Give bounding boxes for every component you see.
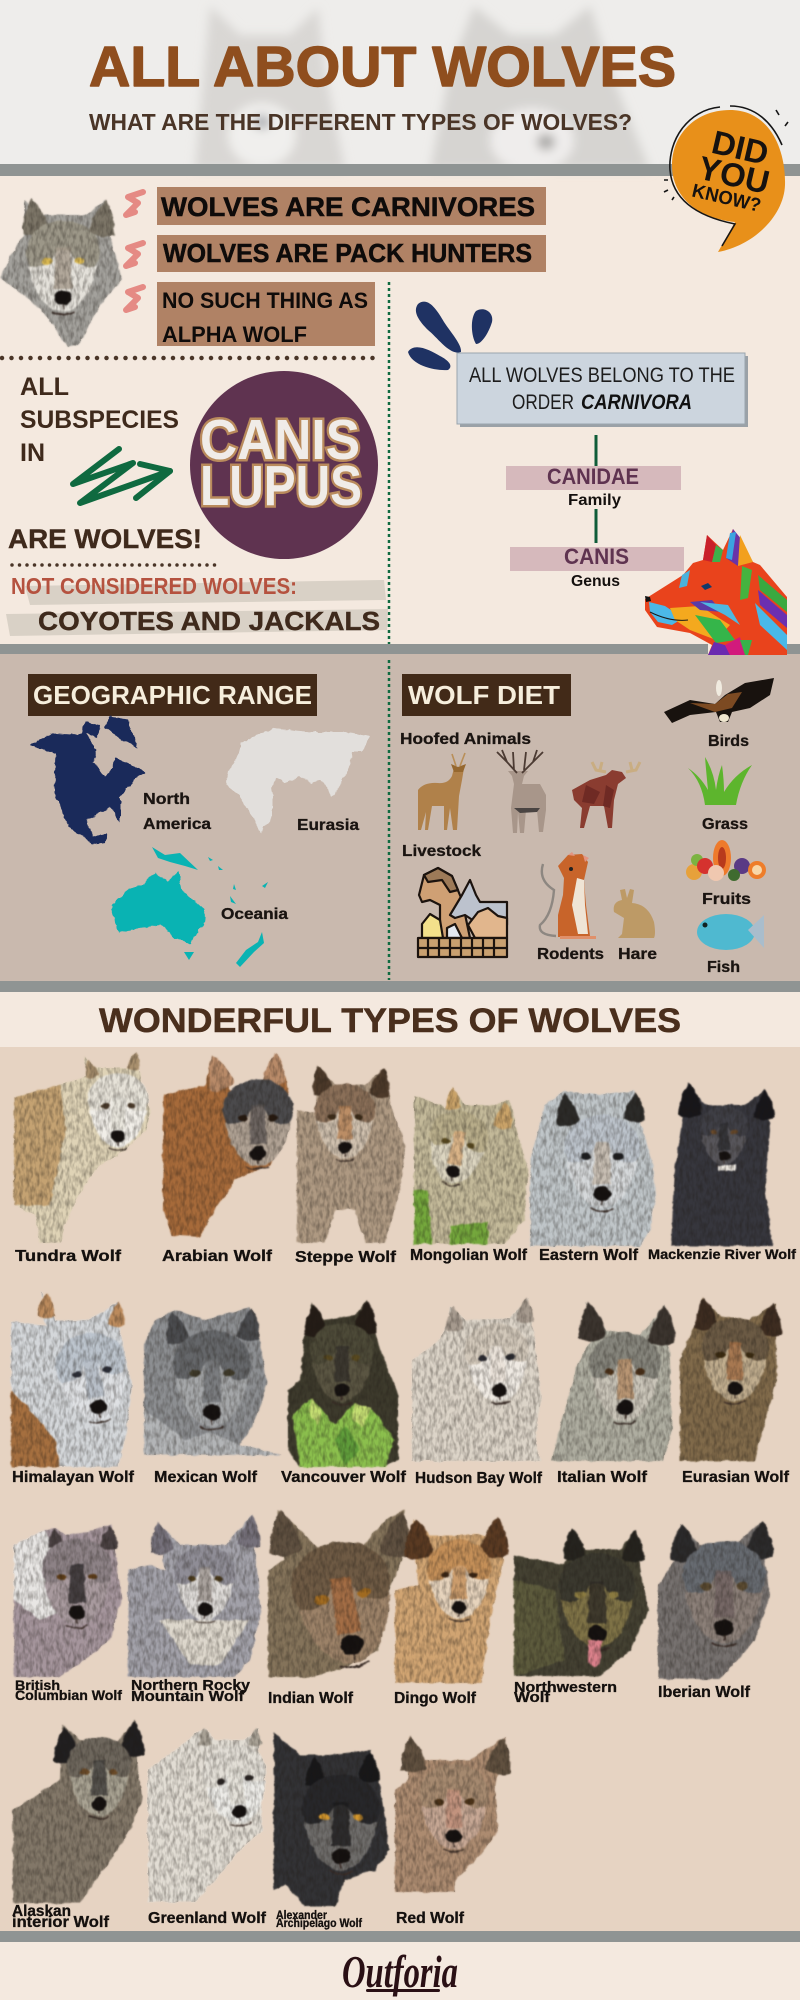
label: livestock: Livestock — [402, 843, 481, 860]
heading: wolf diet: WOLF DIET — [408, 680, 560, 710]
wolf: Mongolian — [410, 1086, 528, 1264]
wolf: Mongolian: Mongolian Wolf — [410, 1247, 528, 1264]
taxonomy: canidae family: Family — [568, 492, 621, 509]
fact: wolves are pack hunters: WOLVES ARE PACK HUNTERS — [163, 238, 532, 268]
panel: wolf gallery — [0, 1047, 800, 1931]
wolf: Dingo — [394, 1515, 511, 1707]
label: fish: Fish — [707, 959, 740, 976]
label: birds: Birds — [708, 733, 749, 750]
taxonomy: canis genus — [510, 544, 684, 590]
wolf: Arabian: Arabian Wolf — [162, 1248, 273, 1265]
icon: rainbow wolf — [645, 529, 787, 655]
wolf: Dingo: Dingo Wolf — [394, 1690, 477, 1707]
label: oceania: Oceania — [221, 906, 288, 923]
wolf: Steppe — [295, 1064, 406, 1266]
wolf: Himalayan — [11, 1292, 136, 1486]
map: eurasia — [226, 728, 370, 833]
wolf: Himalayan: Himalayan Wolf — [12, 1469, 135, 1486]
wolf: Vancouver — [281, 1300, 407, 1486]
wolf: Northwestern: Northwestern — [514, 1679, 617, 1696]
text: are wolves: ARE WOLVES! — [8, 524, 202, 554]
wolf: Iberian — [658, 1519, 776, 1701]
wolf: British Columbian: British — [15, 1677, 60, 1693]
map: north america — [30, 717, 145, 844]
label: grass: Grass — [702, 816, 748, 833]
icon: spotted deer — [418, 753, 466, 830]
text: not considered wolves: NOT CONSIDERED WOLVES: — [11, 573, 297, 599]
subtitle: WHAT ARE THE DIFFERENT TYPES OF WOLVES? — [89, 109, 632, 135]
callout: did you know — [664, 106, 788, 252]
callout: order carnivora — [457, 353, 748, 427]
section band: wonderful types — [0, 992, 800, 1047]
icon: pink bullets — [126, 192, 143, 310]
icon: fruits — [686, 840, 766, 881]
icon: hare — [614, 889, 655, 938]
icon: eagle — [664, 678, 774, 723]
callout: did you know: DID — [708, 123, 772, 172]
wolf: Alaskan Interior: interior Wolf — [12, 1914, 110, 1931]
map: oceania — [111, 847, 268, 967]
wolf: Eastern: Eastern Wolf — [539, 1247, 639, 1264]
header panel with faint wolves — [0, 0, 800, 172]
heading: wonderful types of wolves: WONDERFUL TYPES OF WOLVES — [99, 1002, 681, 1040]
wolf: Northwestern: Wolf — [514, 1689, 551, 1706]
wolf: Eastern — [530, 1091, 656, 1264]
label: hoofed animals: Hoofed Animals — [400, 731, 531, 748]
icon: rodent — [540, 852, 596, 939]
label: eurasia: Eurasia — [297, 817, 359, 834]
heading: geographic range — [28, 674, 317, 716]
wolf: British Columbian: Columbian Wolf — [15, 1687, 122, 1703]
label: rodents and hare — [537, 946, 657, 963]
grey divider bar — [0, 164, 800, 176]
wolf: Alaskan Interior: Alaskan — [12, 1903, 71, 1920]
wolf: Hudson Bay — [412, 1297, 543, 1487]
fact: no alpha wolf: ALPHA WOLF — [162, 322, 307, 347]
wolf: Northwestern — [514, 1527, 649, 1706]
wolf: Greenland — [148, 1728, 273, 1927]
wolf: Northern Rocky Mountain: Mountain Wolf — [131, 1688, 245, 1705]
wolf: Italian — [551, 1301, 678, 1486]
icon: fish — [697, 914, 764, 950]
taxonomy connectors — [594, 435, 598, 543]
label: north america: North — [143, 791, 190, 808]
wolf: Italian: Italian Wolf — [557, 1469, 648, 1486]
icon: wolf head illustration — [0, 196, 122, 347]
wolf: Mackenzie River — [648, 1083, 796, 1262]
wolf: Alaskan Interior — [12, 1720, 147, 1931]
label: rodents and hare: Rodents — [537, 946, 604, 963]
wolf: Indian — [264, 1508, 418, 1707]
text: all subspecies in: ALL — [20, 373, 69, 401]
taxonomy: canidae family — [506, 464, 681, 509]
wolf: Arabian — [162, 1051, 293, 1265]
heading: wolf diet — [402, 674, 571, 716]
wolf: British Columbian — [14, 1524, 122, 1703]
wolf: Mexican — [144, 1306, 281, 1486]
wolf: Alexander Archipelago — [274, 1732, 389, 1930]
fact: no alpha wolf — [157, 282, 375, 347]
wolf: Indian: Indian Wolf — [268, 1690, 354, 1707]
wolf: Iberian: Iberian Wolf — [658, 1684, 751, 1701]
taxonomy: canis genus: CANIS — [564, 544, 629, 569]
wolf: Mackenzie River: Mackenzie River Wolf — [648, 1246, 796, 1262]
brush strokes behind not-wolves text — [6, 580, 388, 636]
wolf: Hudson Bay: Hudson Bay Wolf — [415, 1470, 543, 1487]
wolf: Tundra — [14, 1051, 150, 1265]
heading: geographic range: GEOGRAPHIC RANGE — [33, 680, 312, 710]
icon: moose — [572, 762, 640, 828]
taxonomy: canis genus: Genus — [571, 573, 620, 590]
callout: order carnivora: ALL WOLVES BELONG TO THE — [469, 364, 735, 387]
wolf: Red — [395, 1735, 516, 1927]
wolf: Vancouver: Vancouver Wolf — [281, 1469, 407, 1486]
label: rodents and hare: Hare — [618, 946, 657, 963]
wolf: Steppe: Steppe Wolf — [295, 1249, 397, 1266]
callout: order carnivora: ORDER — [512, 391, 574, 414]
icon: red deer — [497, 750, 546, 833]
fact: no alpha wolf: NO SUCH THING AS — [162, 288, 368, 313]
text: all subspecies in: IN — [20, 439, 45, 467]
footer logo: Outforia: Outforia — [342, 1946, 458, 1997]
wolf: Tundra: Tundra Wolf — [15, 1248, 122, 1265]
fact: wolves are carnivores: WOLVES ARE CARNIVORES — [161, 192, 535, 222]
callout: did you know: KNOW? — [690, 181, 763, 217]
wolf: Eurasian — [680, 1296, 790, 1486]
wolf: Alexander Archipelago: Archipelago Wolf — [276, 1918, 362, 1930]
taxonomy: canidae family: CANIDAE — [547, 464, 639, 489]
callout: order carnivora: CARNIVORA — [581, 391, 692, 414]
icon: grass — [688, 757, 752, 805]
text: all subspecies in: SUBSPECIES — [20, 406, 179, 434]
text: all subspecies in — [20, 373, 179, 467]
arrow: green scribble — [73, 449, 170, 503]
label: fruits: Fruits — [702, 891, 751, 908]
icon: livestock — [418, 868, 507, 957]
callout: did you know: YOU — [695, 149, 773, 201]
wolf: Alexander Archipelago: Alexander — [276, 1910, 327, 1922]
label: north america — [143, 791, 211, 833]
badge: canis lupus: CANIS — [200, 408, 360, 472]
label: north america: America — [143, 816, 211, 833]
badge: canis lupus: LUPUS — [200, 454, 362, 518]
wolf: Northern Rocky Mountain — [128, 1515, 263, 1705]
badge: canis lupus — [190, 371, 378, 559]
wolf: Greenland: Greenland Wolf — [148, 1910, 267, 1927]
wolf: Eurasian: Eurasian Wolf — [682, 1469, 790, 1486]
diet and range panel — [0, 654, 800, 982]
title: ALL ABOUT WOLVES — [89, 35, 676, 99]
text: coyotes and jackals: COYOTES AND JACKALS — [38, 606, 380, 636]
wolf: Red: Red Wolf — [396, 1910, 465, 1927]
wolf: Northern Rocky Mountain: Northern Rocky — [131, 1677, 251, 1694]
wolf: Mexican: Mexican Wolf — [154, 1469, 258, 1486]
icon: blue splash — [408, 302, 492, 370]
